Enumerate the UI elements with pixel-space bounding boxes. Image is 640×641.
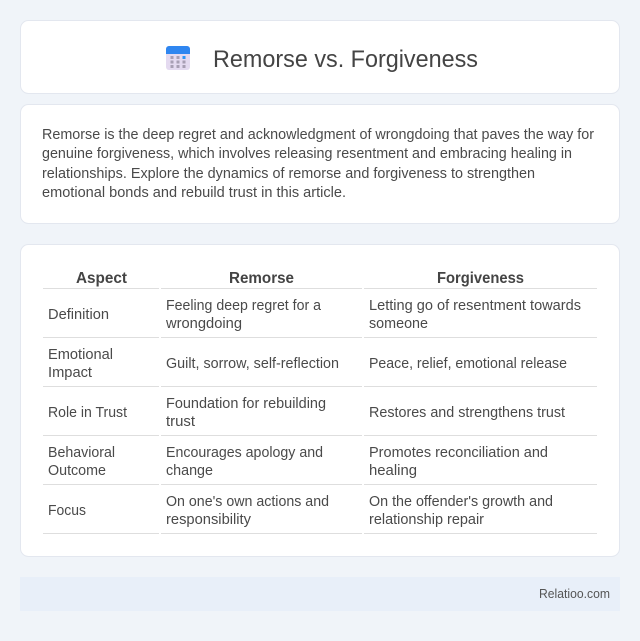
row: definition: someone [369, 316, 428, 332]
title: Remorse vs. Forgiveness [213, 46, 478, 73]
icon: calendar [166, 46, 190, 70]
row: emotional impact: Impact [48, 365, 92, 381]
panel: title card [20, 20, 620, 94]
row: emotional impact: Emotional [48, 347, 113, 363]
row: definition [48, 298, 581, 332]
row: behavioral outcome: Promotes reconciliation and [369, 445, 548, 461]
row: definition: Definition [48, 307, 109, 323]
footer: Relatioo.com [539, 587, 610, 601]
row: focus: Focus [48, 503, 86, 519]
table header: Forgiveness [437, 270, 524, 287]
row: focus [48, 494, 553, 528]
row: definition: Feeling deep regret for a [166, 298, 322, 314]
intro text [42, 127, 594, 201]
row: behavioral outcome: healing [369, 463, 417, 479]
intro text: emotional bonds and rebuild trust in this article. [42, 185, 346, 201]
row: emotional impact: Guilt, sorrow, self-reflection [166, 356, 339, 372]
table header [76, 270, 524, 287]
row: role in trust: Role in Trust [48, 405, 127, 421]
row: focus: relationship repair [369, 512, 484, 528]
row: role in trust: Foundation for rebuilding [166, 396, 326, 412]
intro text: relationships. Explore the dynamics of remorse and forgiveness to strengthen [42, 166, 535, 182]
row: focus: responsibility [166, 512, 252, 528]
row: emotional impact: Peace, relief, emotional release [369, 356, 567, 372]
footer [20, 577, 620, 611]
row: role in trust: Restores and strengthens trust [369, 405, 565, 421]
row: behavioral outcome: Behavioral [48, 445, 115, 461]
row: behavioral outcome: Outcome [48, 463, 106, 479]
row: focus: On one's own actions and [166, 494, 329, 510]
row: role in trust [48, 396, 565, 430]
row: emotional impact [48, 347, 567, 381]
intro text: genuine forgiveness, which involves releasing resentment and embracing healing in [42, 146, 572, 162]
row: behavioral outcome [48, 445, 548, 479]
row: behavioral outcome: change [166, 463, 213, 479]
row: definition: wrongdoing [165, 316, 242, 332]
row: behavioral outcome: Encourages apology and [166, 445, 323, 461]
table header: Remorse [229, 270, 294, 287]
panel: comparison table [20, 244, 620, 556]
row: focus: On the offender's growth and [369, 494, 553, 510]
table header: Aspect [76, 270, 127, 287]
row: role in trust: trust [166, 414, 195, 430]
panel: introduction [20, 104, 620, 224]
intro text: Remorse is the deep regret and acknowledgment of wrongdoing that paves the way for [42, 127, 594, 143]
row: definition: Letting go of resentment towards [369, 298, 581, 314]
